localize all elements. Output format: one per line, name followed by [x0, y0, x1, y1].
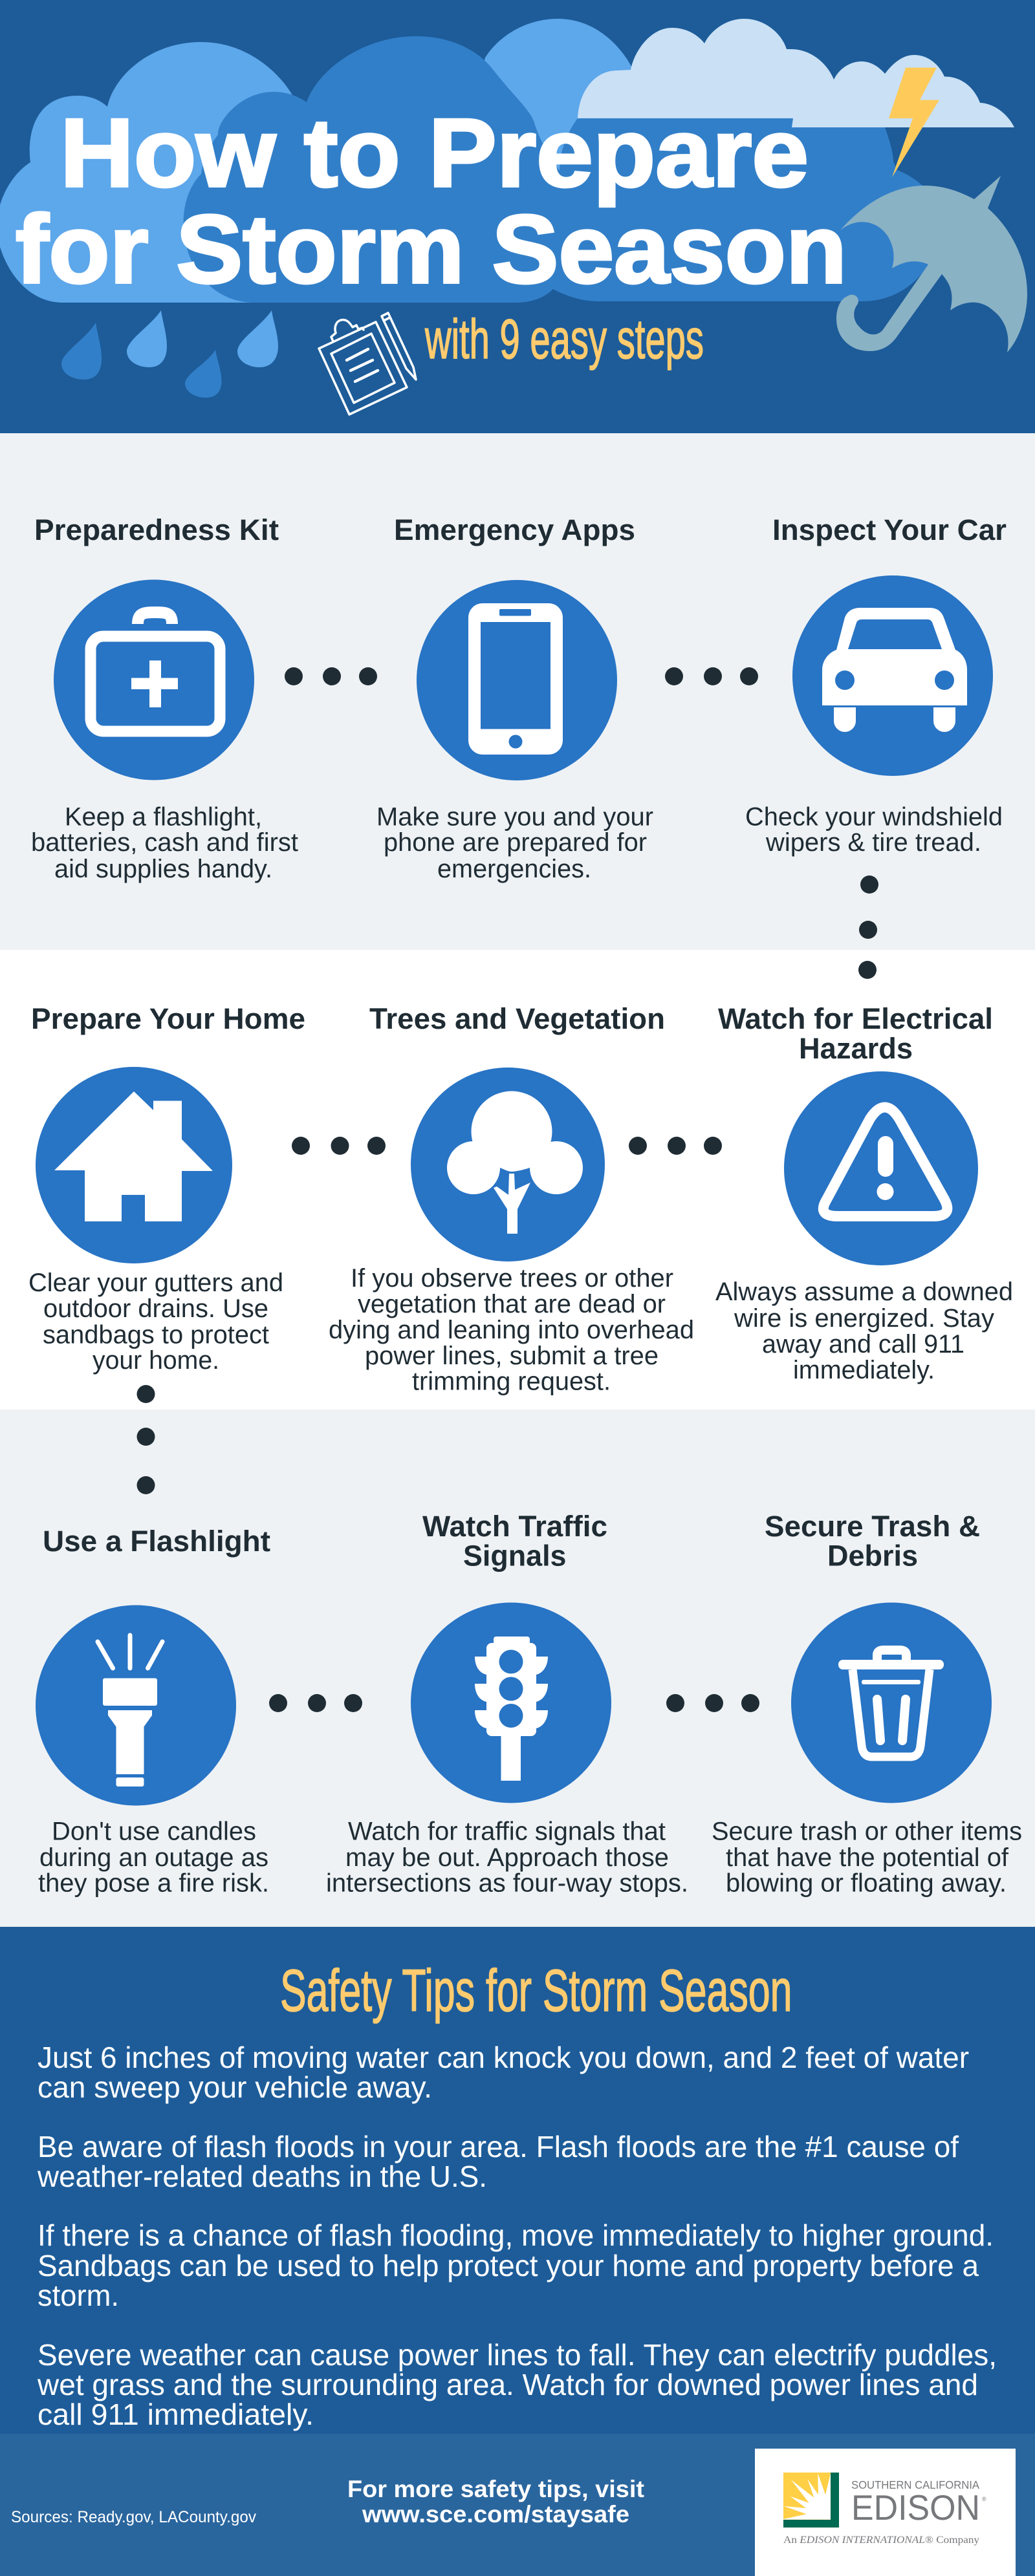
icon: clipboard and pencil	[319, 313, 416, 414]
title: How to Prepare	[60, 98, 809, 207]
step: watch for electrical hazards	[715, 1002, 1013, 1384]
icon: lightning bolt	[889, 68, 939, 177]
icon: rain drops	[61, 310, 278, 398]
tip: higher ground: Sandbags can be used to help protect your home and property before a	[38, 2249, 979, 2282]
heading: safety tips: Safety Tips for Storm Season	[280, 1958, 792, 2024]
description: Always assume a downed	[715, 1278, 1013, 1306]
description: may be out. Approach those	[345, 1843, 669, 1872]
description	[28, 1269, 283, 1375]
icon: tree	[411, 1068, 605, 1261]
description: vegetation that are dead or	[358, 1290, 666, 1318]
connector dots	[665, 667, 758, 685]
tip: power lines: Severe weather can cause power lines to fall. They can electrify puddles,	[38, 2338, 997, 2372]
heading: Secure Trash &	[765, 1510, 980, 1543]
connector dots	[292, 1137, 386, 1155]
description: immediately.	[793, 1356, 935, 1384]
tip: power lines	[37, 2338, 997, 2431]
step: secure trash and debris	[712, 1510, 1022, 1897]
step: emergency apps	[376, 513, 653, 883]
tip: higher ground: storm.	[38, 2279, 119, 2312]
description: Secure trash or other items	[712, 1817, 1022, 1845]
tip: moving water: Just 6 inches of moving water can knock you down, and 2 feet of water	[38, 2041, 969, 2074]
icon: car	[792, 575, 993, 776]
left light-blue cloud	[0, 42, 304, 303]
step: inspect your car	[745, 513, 1007, 857]
call to action: For more safety tips, visit	[347, 2476, 644, 2502]
description: during an outage as	[39, 1843, 268, 1872]
description	[745, 803, 1003, 857]
connector dots	[858, 875, 878, 979]
description: away and call 911	[762, 1330, 964, 1358]
description: Don't use candles	[52, 1817, 256, 1845]
panel: first row background	[0, 433, 1035, 950]
description	[376, 803, 653, 883]
heading	[718, 1002, 993, 1065]
description: power lines, submit a tree	[365, 1342, 659, 1370]
panel: safety tips	[0, 1927, 1035, 2434]
back light-blue cloud	[453, 19, 634, 181]
title: for Storm Season	[16, 195, 847, 303]
description: intersections as four-way stops.	[326, 1869, 688, 1897]
logo: southern california edison: An EDISON INTERNATIONAL ® Company	[783, 2535, 979, 2546]
description	[712, 1817, 1022, 1897]
heading: Hazards	[799, 1032, 913, 1065]
icon: house	[36, 1067, 232, 1263]
subtitle: with 9 easy steps	[424, 308, 704, 370]
description: Check your windshield	[745, 803, 1003, 832]
tip: flash floods: weather-related deaths in the U.S.	[37, 2160, 487, 2193]
description: that have the potential of	[726, 1843, 1009, 1872]
connector dots	[269, 1694, 362, 1712]
heading: Debris	[827, 1539, 918, 1572]
description: your home.	[93, 1346, 219, 1375]
heading: Preparedness Kit	[34, 513, 279, 546]
description: Keep a flashlight,	[65, 803, 262, 832]
pale storm cloud	[578, 19, 1014, 127]
heading: Watch for Electrical	[718, 1002, 993, 1035]
logo: southern california edison: EDISON	[851, 2487, 980, 2528]
description: batteries, cash and first	[31, 828, 298, 857]
description: trimming request.	[412, 1367, 611, 1395]
tip: flash floods: Be aware of flash floods in your area. Flash floods are the #1 cause of	[38, 2130, 959, 2163]
description: emergencies.	[437, 855, 591, 883]
description: outdoor drains. Use	[43, 1294, 268, 1323]
heading: Signals	[463, 1539, 567, 1572]
tip: moving water	[38, 2041, 969, 2104]
icon: traffic light	[411, 1602, 611, 1803]
description	[326, 1817, 688, 1897]
heading: Emergency Apps	[394, 513, 635, 546]
panel: header	[0, 0, 1035, 433]
description: Clear your gutters and	[28, 1269, 283, 1297]
step: prepare your home	[28, 1002, 305, 1375]
description: wipers & tire tread.	[765, 828, 981, 857]
description: Watch for traffic signals that	[348, 1817, 666, 1845]
description	[329, 1264, 694, 1395]
description: If you observe trees or other	[351, 1264, 673, 1293]
logo: southern california edison	[755, 2449, 1016, 2576]
main mid-blue cloud	[184, 36, 932, 303]
description: aid supplies handy.	[54, 855, 272, 883]
tip: higher ground	[38, 2218, 994, 2312]
tip: flash floods	[37, 2130, 959, 2193]
connector dots	[666, 1694, 759, 1712]
heading	[422, 1510, 607, 1572]
description: Make sure you and your	[376, 803, 653, 832]
heading: Trees and Vegetation	[369, 1002, 665, 1035]
heading: Inspect Your Car	[772, 513, 1007, 546]
step: use a flashlight	[36, 1525, 270, 1897]
icon: first aid kit	[54, 579, 254, 780]
title	[16, 98, 847, 303]
tip: moving water: can sweep your vehicle away.	[38, 2070, 432, 2104]
heading: Watch Traffic	[422, 1510, 607, 1543]
tip: power lines: wet grass and the surrounding area. Watch for downed power lines and	[37, 2368, 978, 2401]
heading: Prepare Your Home	[31, 1002, 305, 1035]
call to action	[347, 2476, 644, 2528]
tip: higher ground: If there is a chance of flash flooding, move immediately to higher ground.	[38, 2218, 994, 2252]
connector dots	[629, 1137, 722, 1155]
description: wire is energized. Stay	[734, 1304, 994, 1333]
icon: flashlight	[36, 1605, 236, 1805]
heading: Use a Flashlight	[43, 1525, 270, 1558]
icon: smartphone	[417, 580, 617, 780]
heading	[765, 1510, 980, 1572]
icon: warning triangle	[784, 1071, 978, 1265]
sources: Sources: Ready.gov, LACounty.gov	[11, 2508, 256, 2526]
tip: power lines: call 911 immediately.	[38, 2398, 314, 2431]
connector dots	[285, 667, 377, 685]
panel: second row background	[0, 950, 1035, 1410]
description: phone are prepared for	[384, 828, 647, 857]
description	[715, 1278, 1013, 1384]
icon: umbrella	[836, 176, 1027, 352]
description: blowing or floating away.	[726, 1869, 1007, 1897]
description: sandbags to protect	[43, 1320, 269, 1349]
description: dying and leaning into overhead	[329, 1316, 694, 1344]
panel: third row background	[0, 1410, 1035, 1927]
connector dots	[137, 1385, 155, 1494]
description	[38, 1817, 269, 1897]
step: preparedness kit	[31, 513, 298, 883]
step: trees and vegetation	[329, 1002, 694, 1395]
logo: southern california edison: ®	[982, 2496, 986, 2502]
description: they pose a fire risk.	[38, 1869, 269, 1897]
logo: southern california edison: SOUTHERN CALIFORNIA	[851, 2478, 979, 2491]
panel: footer	[0, 2434, 1035, 2576]
icon: trash can	[791, 1602, 992, 1803]
step: watch traffic signals	[326, 1510, 688, 1897]
description	[31, 803, 298, 883]
call to action: www.sce.com/staysafe	[362, 2501, 629, 2528]
